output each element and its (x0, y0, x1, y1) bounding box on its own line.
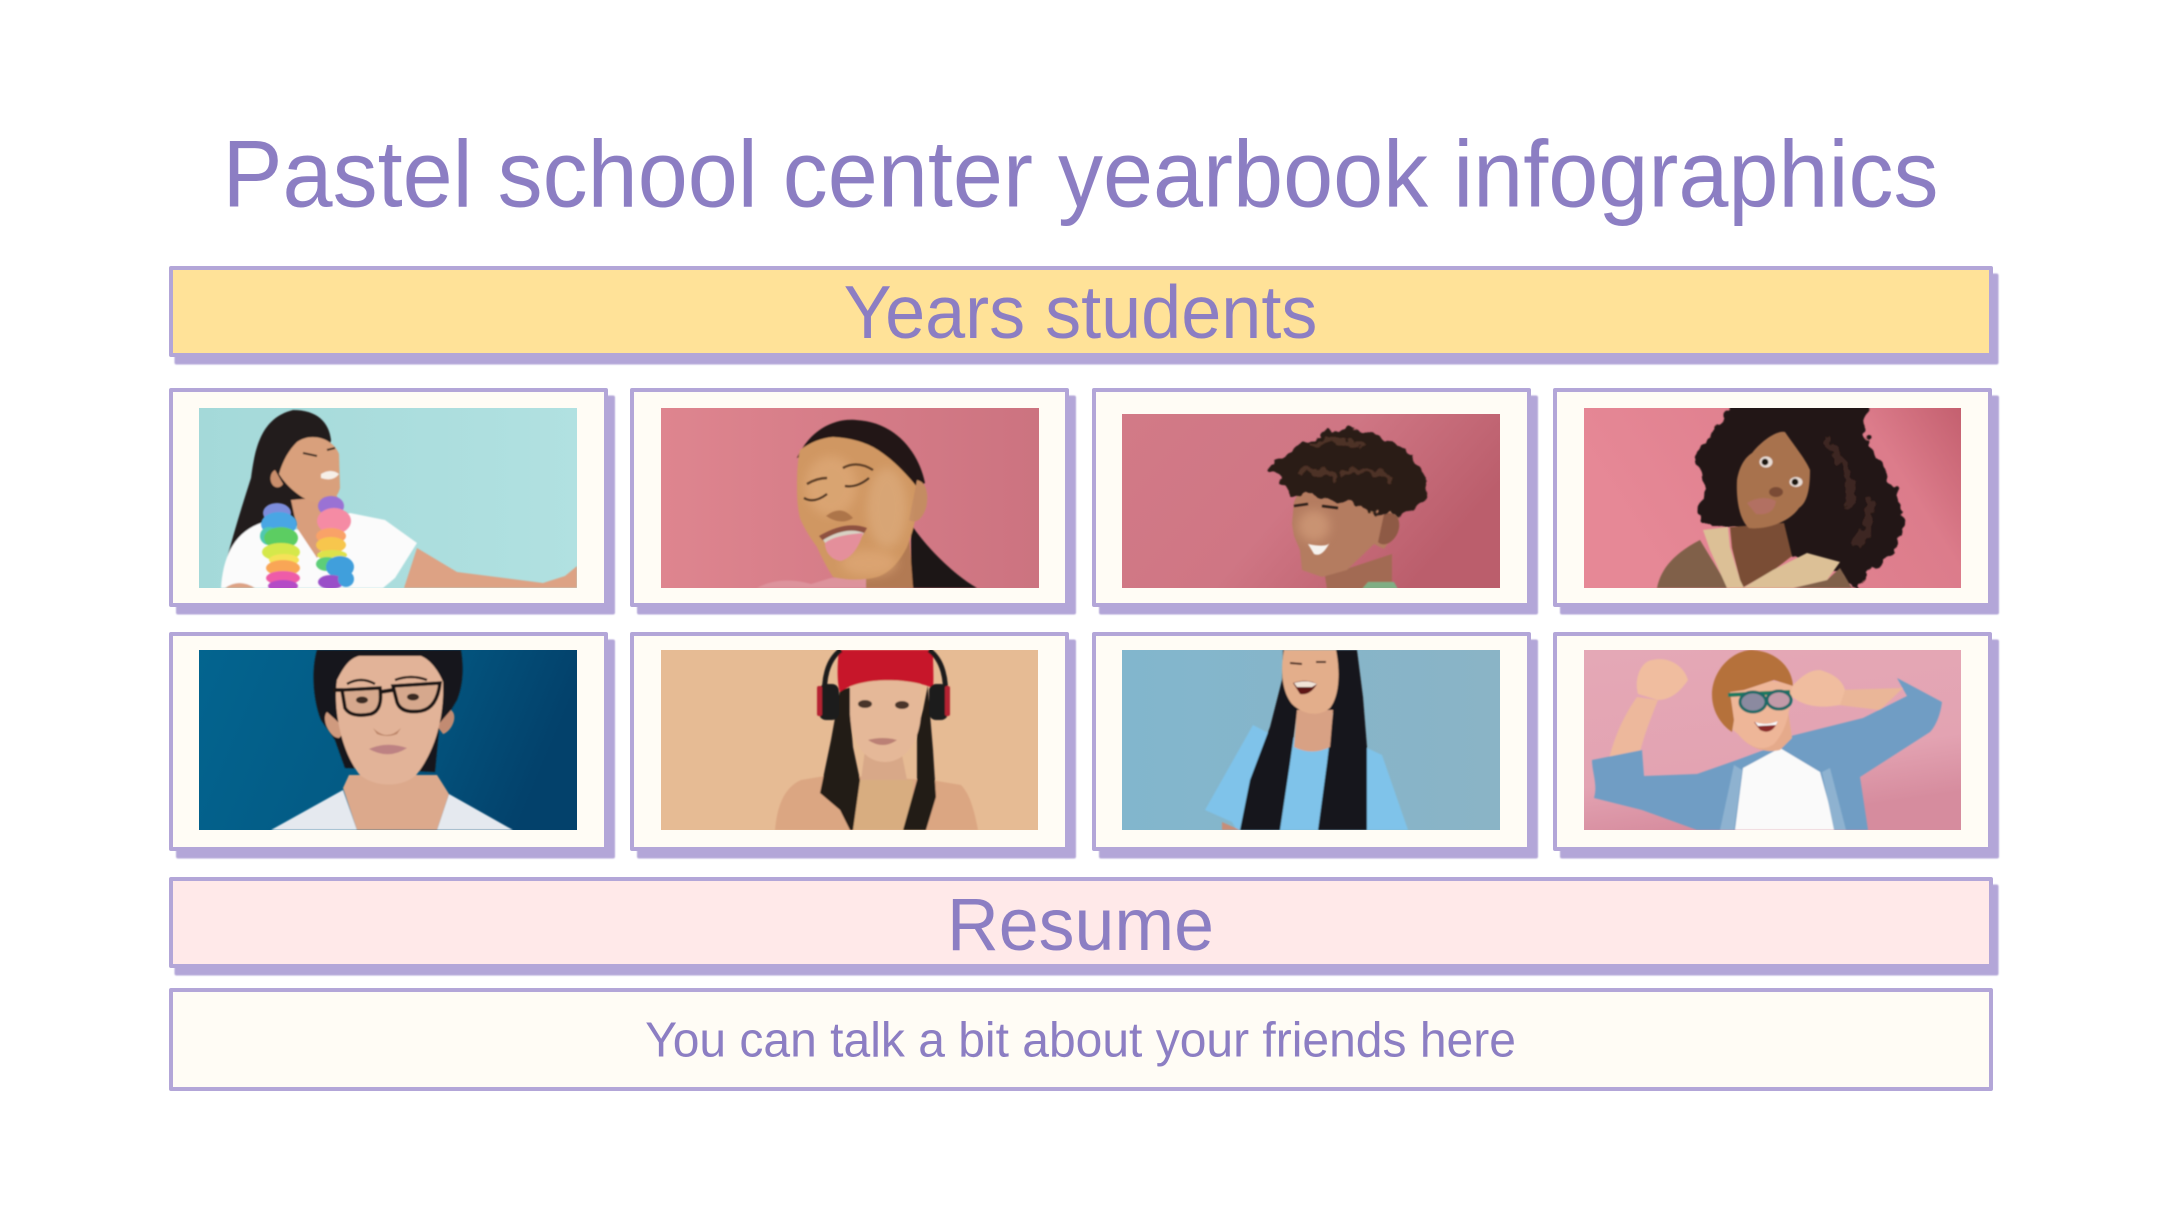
panel: friends text box (168, 988, 1992, 1091)
panel: photo card 7 (1092, 632, 1531, 851)
panel: photo card 6 (630, 632, 1069, 851)
photo: boy with curly hair (1122, 414, 1500, 588)
panel: years students banner (168, 266, 1992, 357)
photo: girl sticking out tongue (661, 408, 1039, 588)
panel: photo card 8 (1553, 632, 1992, 851)
panel: photo card 2 (630, 388, 1069, 607)
photo: girl with red hat and headphones (661, 650, 1038, 830)
panel: resume banner (168, 877, 1992, 968)
text: friends description: You can talk a bit about your friends here (645, 1014, 1516, 1068)
afro hair (1695, 402, 1906, 590)
photo: boy with green glasses dancing (1584, 650, 1961, 830)
heading: years students: Years students (844, 272, 1317, 355)
panel: photo card 5 (168, 632, 608, 851)
photo: girl with rainbow lei (199, 408, 577, 588)
curly hair (1268, 428, 1428, 517)
panel: photo card 3 (1092, 388, 1531, 607)
photo: girl with afro hair (1584, 408, 1961, 588)
panel: photo card 4 (1553, 388, 1992, 607)
right lei column (316, 496, 354, 589)
photo: laughing girl with long hair (1122, 650, 1500, 830)
panel: photo card 1 (168, 388, 608, 607)
left lei column (260, 503, 300, 592)
photo: boy with glasses (199, 650, 577, 830)
heading: resume: Resume (947, 884, 1214, 967)
title: Pastel school center yearbook infographics (222, 122, 1938, 228)
